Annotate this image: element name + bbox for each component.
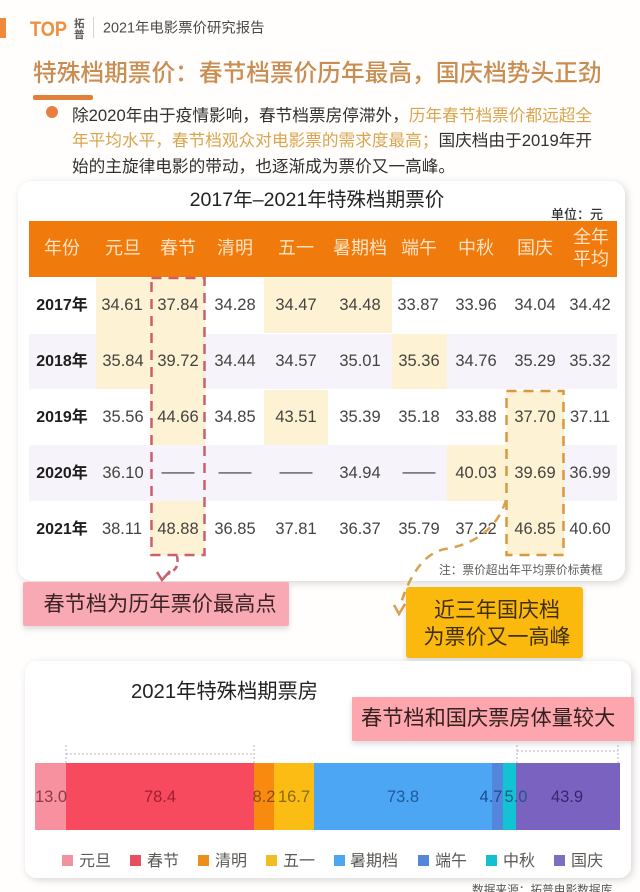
- row 2017: 2017年: [36, 295, 88, 314]
- row 2021: 37.22: [455, 520, 497, 538]
- row 2017: 34.28: [214, 296, 256, 314]
- row 2019: 2019年: [36, 407, 88, 426]
- row 2019: 43.51: [275, 408, 317, 426]
- intro text: 除2020年由于疫情影响，春节档票房停滞外，历年春节档票价都远超全: [72, 106, 592, 125]
- stacked bar: 5.0: [505, 788, 527, 806]
- row 2018: 2018年: [36, 351, 88, 370]
- row 2018: 35.32: [569, 352, 611, 370]
- table header: 暑期档: [333, 238, 387, 258]
- row 2018: 35.01: [339, 352, 381, 370]
- table header: 中秋: [458, 238, 494, 258]
- main title: 特殊档期票价：春节档票价历年最高，国庆档势头正劲: [33, 60, 602, 87]
- legend: [62, 852, 603, 870]
- row 2017: 33.96: [455, 296, 497, 314]
- row 2018: 34.44: [214, 352, 256, 370]
- table header: 全年: [573, 227, 609, 247]
- callout: box office: 春节档和国庆票房体量较大: [361, 706, 615, 730]
- row 2019: 37.11: [570, 408, 610, 426]
- logo: 拓: [74, 17, 85, 30]
- row 2017: 34.48: [339, 296, 381, 314]
- brackets: [66, 745, 618, 763]
- row 2017: 34.61: [101, 296, 143, 314]
- row 2017: 34.42: [569, 296, 611, 314]
- table header: 国庆: [517, 238, 553, 258]
- red dashed highlight: spring festival column: [152, 278, 204, 555]
- panel: box office chart: [25, 661, 631, 878]
- table header: 春节: [160, 238, 196, 258]
- row 2020: [36, 463, 611, 482]
- stacked bar: 16.7: [278, 788, 310, 806]
- legend: 中秋: [503, 852, 535, 870]
- intro text: [72, 106, 592, 176]
- chart title: 2021年特殊档期票房: [131, 680, 318, 703]
- legend: 五一: [283, 853, 315, 870]
- table header: 平均: [573, 249, 609, 269]
- row 2020: ——: [402, 463, 436, 481]
- row 2018: 34.76: [455, 352, 497, 370]
- row 2021: 46.85: [514, 520, 556, 538]
- table header: 五一: [278, 238, 314, 258]
- legend: 春节: [147, 852, 179, 870]
- row 2018: 39.72: [157, 352, 199, 370]
- row 2019: 35.39: [339, 408, 381, 426]
- header tab: [0, 18, 6, 38]
- row backgrounds and highlights: [29, 278, 617, 555]
- row 2020: ——: [162, 463, 195, 481]
- row 2019: 34.85: [214, 408, 256, 426]
- table header: 端午: [401, 238, 437, 258]
- intro text: 年平均水平，春节档观众对电影票的需求度最高；国庆档由于2019年开: [72, 131, 592, 150]
- stacked bar: 43.9: [551, 788, 583, 806]
- logo: TOP: [30, 18, 67, 41]
- row 2018: 34.57: [275, 352, 317, 370]
- row 2020: 36.10: [102, 464, 144, 482]
- callout: spring festival: 春节档为历年票价最高点: [43, 592, 277, 616]
- row 2021: 38.11: [102, 520, 142, 538]
- callout: national day: [406, 587, 583, 658]
- row 2017: 34.04: [514, 296, 556, 314]
- row 2019: [36, 407, 610, 426]
- legend: 端午: [435, 852, 467, 870]
- row 2020: 39.69: [514, 464, 556, 482]
- row 2018: 35.36: [398, 352, 440, 370]
- row 2019: 35.56: [102, 408, 144, 426]
- title underline: [33, 95, 93, 100]
- legend: 国庆: [571, 852, 603, 870]
- arrow: national day: [394, 500, 506, 614]
- table header: 年份: [44, 238, 80, 258]
- callout: national day: 为票价又一高峰: [424, 626, 570, 649]
- callout: national day: 近三年国庆档: [434, 599, 560, 622]
- table header: 元旦: [105, 238, 141, 258]
- legend: 暑期档: [350, 852, 398, 870]
- unit label: 单位：元: [551, 207, 603, 222]
- row 2021: [36, 519, 611, 538]
- legend: 清明: [215, 852, 247, 870]
- stacked bar: 73.8: [387, 788, 419, 806]
- panel: ticket price table: [18, 181, 625, 581]
- row 2021: 48.88: [157, 520, 199, 538]
- row 2019: 33.88: [455, 408, 497, 426]
- legend: 元旦: [79, 853, 111, 870]
- row 2018: 35.84: [102, 352, 144, 370]
- row 2021: 2021年: [36, 519, 88, 538]
- row 2018: [36, 351, 611, 370]
- row 2021: 40.60: [569, 520, 611, 538]
- row 2021: 36.37: [339, 520, 381, 538]
- arrow: spring festival: [157, 556, 178, 580]
- table header: [29, 221, 617, 277]
- row 2020: 34.94: [339, 464, 381, 482]
- row 2021: 37.81: [275, 520, 317, 538]
- stacked bar: [35, 763, 620, 830]
- row 2020: 2020年: [36, 463, 88, 482]
- row 2018: 35.29: [514, 352, 556, 370]
- row 2017: 33.87: [397, 296, 439, 314]
- row 2020: 36.99: [569, 464, 611, 482]
- row 2019: 35.18: [398, 408, 440, 426]
- row 2017: [36, 295, 611, 314]
- logo: [30, 17, 94, 41]
- row 2019: 44.66: [157, 408, 199, 426]
- footnote: 注：票价超出年平均票价标黄框: [439, 563, 603, 577]
- table header: 清明: [217, 238, 253, 258]
- table title: 2017年–2021年特殊档期票价: [190, 189, 444, 211]
- stacked bar: 78.4: [144, 788, 176, 806]
- row 2020: ——: [280, 463, 313, 481]
- stacked bar: 4.7: [480, 788, 502, 806]
- row 2020: 40.03: [455, 464, 497, 482]
- intro text: 始的主旋律电影的带动，也逐渐成为票价又一高峰。: [72, 157, 455, 176]
- callout: spring festival: [23, 582, 289, 626]
- row 2017: 37.84: [157, 296, 199, 314]
- callout: box office: [352, 697, 634, 741]
- row 2021: 35.79: [398, 520, 440, 538]
- row 2019: 37.70: [514, 408, 556, 426]
- stacked bar: 8.2: [253, 788, 275, 806]
- logo: 普: [74, 28, 85, 41]
- row 2021: 36.85: [214, 520, 256, 538]
- orange dashed highlight: national day column: [506, 391, 564, 555]
- row 2020: ——: [218, 463, 252, 481]
- report name: 2021年电影票价研究报告: [103, 20, 265, 36]
- stacked bar: 13.0: [35, 788, 67, 806]
- bullet: [46, 106, 58, 118]
- row 2017: 34.47: [275, 296, 317, 314]
